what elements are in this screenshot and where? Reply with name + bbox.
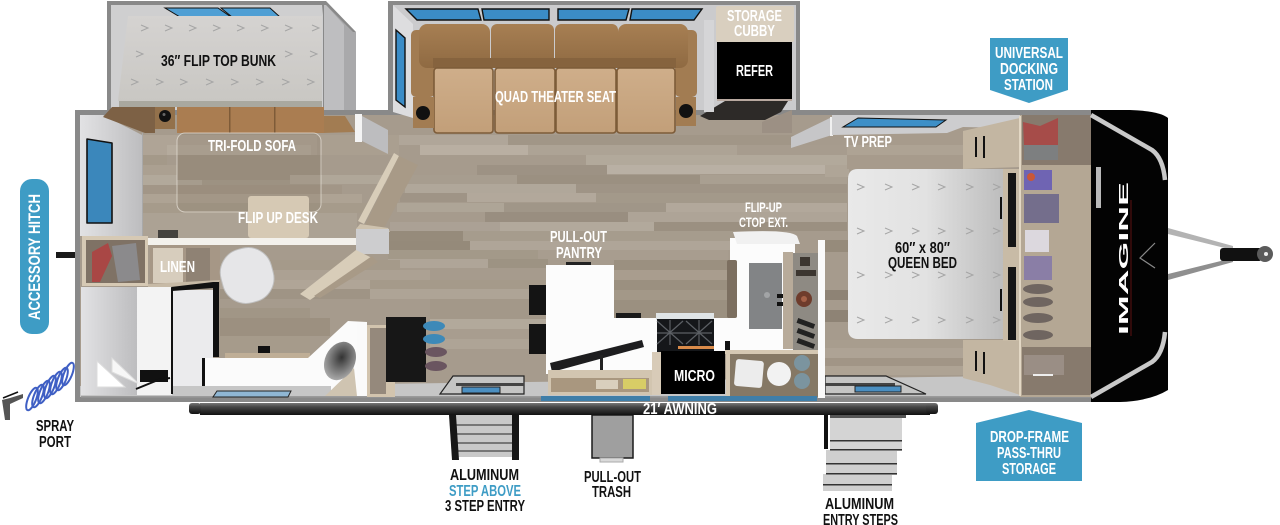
label: pantry	[550, 229, 607, 262]
panel: angled door wall	[791, 117, 833, 148]
label: step above: ALUMINUM	[450, 467, 519, 484]
microwave	[661, 351, 725, 394]
label: queen bed: 60″ x 80″	[895, 240, 950, 257]
label: trash: TRASH	[592, 484, 631, 501]
label: sofa: TRI-FOLD SOFA	[208, 138, 296, 155]
panel: theater slide	[393, 5, 796, 133]
icon: spray nozzle	[2, 392, 23, 420]
label: bunk: 36″ FLIP TOP BUNK	[161, 53, 276, 70]
rug: entry	[440, 376, 524, 394]
label: step above: 3 STEP ENTRY	[445, 498, 525, 515]
panel: bedroom cabinets	[963, 118, 1020, 395]
label: trash	[584, 469, 641, 501]
label: entry steps	[823, 496, 898, 525]
brand name: IMAGINE	[1117, 182, 1131, 335]
icon: theater windows	[396, 9, 702, 107]
front wall floor strip	[80, 375, 1092, 398]
quad theater seat	[411, 24, 697, 133]
label: seat: QUAD THEATER SEAT	[495, 89, 616, 106]
callout: drop-frame storage: STORAGE	[1002, 461, 1056, 478]
panel: dinette chairs	[529, 285, 546, 354]
label: queen bed	[888, 240, 957, 272]
panel: kitchen counter	[546, 231, 825, 398]
floorplan body	[75, 1, 1092, 402]
icon: stove	[656, 313, 730, 352]
icon: bunk windows	[165, 8, 280, 17]
icon: faucet	[136, 370, 170, 389]
panel: linen storage	[82, 236, 220, 289]
flip up desk	[248, 196, 309, 238]
rug: bedroom	[825, 376, 926, 394]
callout: universal docking station	[990, 38, 1068, 103]
lower angled door	[300, 250, 378, 300]
callout: universal docking station: STATION	[1004, 77, 1053, 94]
angled closet door	[356, 153, 418, 254]
wall stub top	[355, 114, 388, 154]
rug: bathroom	[213, 391, 291, 397]
kitchen bin	[725, 350, 818, 397]
icon: rear window	[87, 139, 112, 223]
sofa bed outline	[177, 133, 321, 212]
interior wall	[148, 230, 356, 245]
label: cubby	[727, 8, 782, 40]
icon: shoes	[423, 321, 447, 371]
panel: pass-thru closet	[1019, 115, 1091, 397]
rug strips	[541, 396, 817, 401]
label: linen: LINEN	[160, 259, 195, 276]
bed chevrons	[857, 184, 1000, 323]
label: flip-up countertop: FLIP-UP	[745, 199, 782, 215]
rear wall	[80, 115, 143, 236]
labels	[36, 8, 957, 525]
icon: spray hose	[24, 361, 76, 412]
label: micro: MICRO	[674, 368, 715, 385]
callout: universal docking station: UNIVERSAL	[995, 45, 1063, 62]
floor base	[80, 115, 1092, 397]
panel: queen bed	[848, 169, 1020, 341]
label: tv prep: TV PREP	[844, 134, 892, 151]
bunk chevrons	[131, 25, 319, 85]
pull-out trash	[592, 415, 633, 462]
callout: drop-frame storage	[976, 410, 1082, 481]
step above entry stairs	[449, 415, 519, 460]
callout: drop-frame storage: PASS-THRU	[997, 445, 1061, 462]
label: pantry: PULL-OUT	[550, 229, 607, 246]
pantry drawers	[548, 352, 661, 395]
label: entry steps: ALUMINUM	[825, 496, 894, 513]
label: cubby: STORAGE	[727, 8, 782, 25]
panel: tri-fold sofa	[103, 107, 355, 212]
front cap	[1091, 110, 1168, 402]
icon: kitchen sink	[749, 263, 787, 329]
label: step above: STEP ABOVE	[449, 483, 521, 500]
label: awning: 21′ AWNING	[643, 401, 717, 418]
entry stairs	[823, 415, 906, 491]
awning	[189, 403, 938, 415]
callout: accessory hitch: ACCESSORY HITCH	[25, 194, 44, 320]
callout: universal docking station: DOCKING	[1000, 61, 1058, 78]
floor planks	[142, 127, 966, 375]
icon: toilet	[215, 242, 279, 309]
icon: bedroom window	[843, 118, 946, 127]
bunk mattress	[118, 16, 322, 107]
callout: accessory hitch	[20, 179, 49, 334]
label: spray port	[36, 418, 74, 451]
label: pantry: PANTRY	[556, 245, 602, 262]
storage cubby	[716, 6, 794, 42]
panel: bath counter	[205, 317, 426, 397]
label: refer: REFER	[736, 63, 773, 80]
flip-up countertop	[733, 231, 800, 244]
label: queen bed: QUEEN BED	[888, 255, 957, 272]
label: flip-up countertop: CTOP EXT.	[739, 214, 788, 230]
callout: drop-frame storage: DROP-FRAME	[990, 429, 1069, 446]
bed side panels	[1000, 169, 1020, 341]
clothes	[1023, 170, 1059, 340]
label: trash: PULL-OUT	[584, 469, 641, 486]
label: desk: FLIP UP DESK	[238, 210, 318, 227]
refrigerator	[700, 42, 792, 120]
label: flip-up countertop	[739, 199, 788, 230]
label: spray port: PORT	[39, 434, 71, 451]
panel: bunk slide	[111, 5, 356, 110]
top wall bedroom	[832, 115, 1020, 135]
panel: shower	[81, 282, 219, 395]
icon: angled flip counter	[550, 340, 644, 372]
label: step above	[445, 467, 525, 515]
outer walls	[75, 1, 1092, 402]
icon: trailer hitch	[1168, 228, 1273, 280]
label: spray port: SPRAY	[36, 418, 74, 435]
icon: rear hitch receiver	[56, 252, 75, 258]
label: cubby: CUBBY	[734, 23, 775, 40]
